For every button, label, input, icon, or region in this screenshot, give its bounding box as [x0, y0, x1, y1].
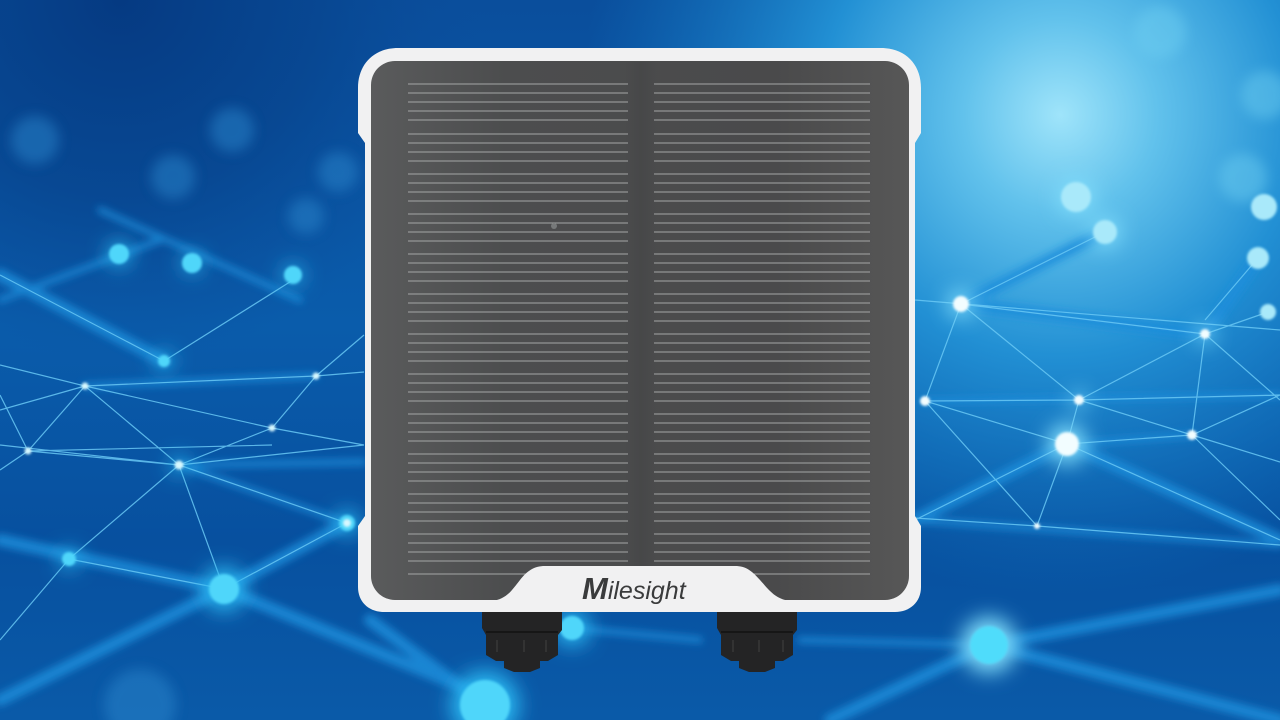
white housing — [358, 48, 921, 612]
Milesight logo: Milesight — [582, 571, 687, 606]
product: solar device — [358, 48, 921, 672]
dark solar panel — [371, 61, 909, 600]
left cable connector — [482, 611, 562, 672]
network background: glowing nodes left — [11, 108, 590, 720]
network background: wide soft beams — [0, 210, 1280, 720]
white logo tab — [492, 566, 790, 601]
left solar cell grid lines — [408, 84, 628, 574]
network background: thin connection lines left — [0, 275, 364, 640]
panel centre gap — [625, 62, 657, 599]
network background: glowing nodes right — [920, 6, 1280, 673]
right solar cell grid lines — [654, 84, 870, 574]
panel speck — [551, 223, 557, 229]
right cable connector — [717, 611, 797, 672]
network background: thin connection lines right — [915, 232, 1280, 545]
